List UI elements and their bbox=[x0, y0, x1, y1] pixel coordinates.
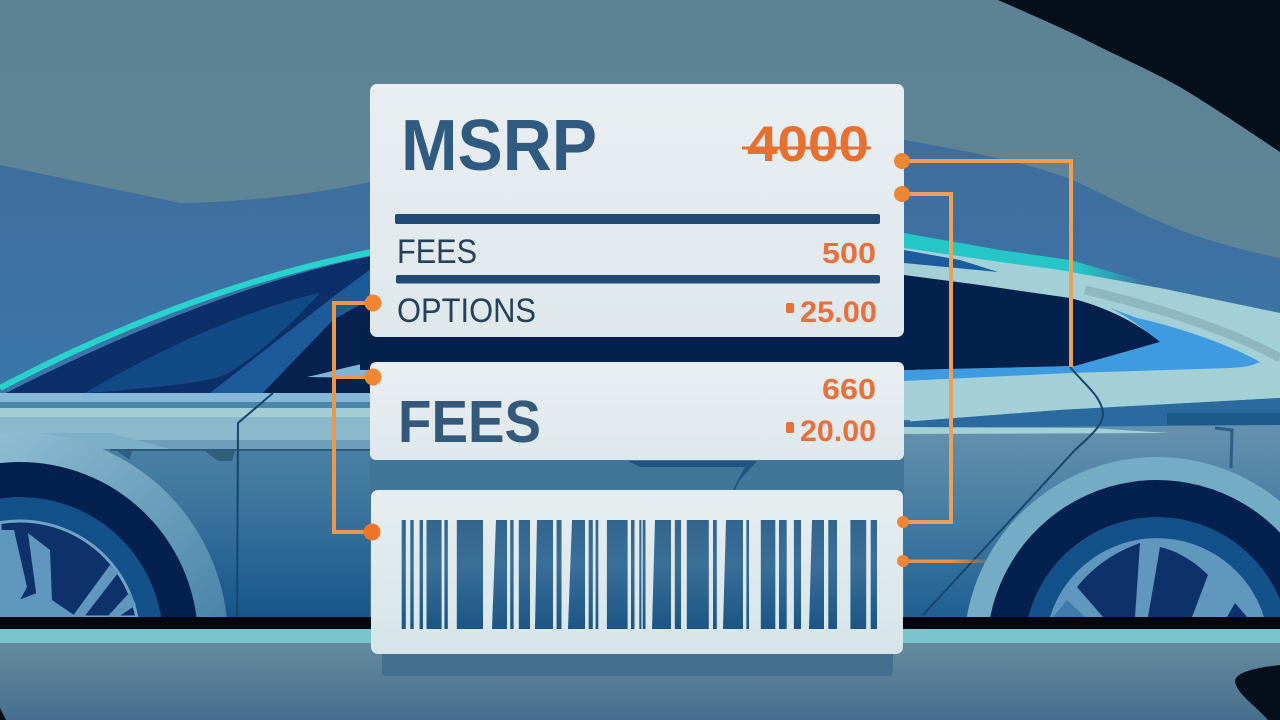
blue hill behind car bbox=[0, 140, 1280, 430]
connector: left bracket bbox=[334, 303, 373, 532]
barcode bbox=[402, 520, 877, 629]
left wheel bbox=[0, 432, 227, 617]
teal roof line left bbox=[0, 252, 372, 388]
price: struck through: 4000 bbox=[747, 116, 869, 172]
dark shape bottom right bbox=[1235, 665, 1280, 720]
pale lower stripe right bbox=[904, 427, 1170, 434]
dark corner top right bbox=[998, 0, 1280, 152]
divider two bbox=[396, 275, 880, 284]
blue band right bbox=[904, 398, 1280, 428]
ground band bbox=[0, 617, 1280, 720]
windshield teal trim right bbox=[904, 233, 1150, 283]
connector: top right to car bbox=[902, 161, 1071, 367]
dark accent right bbox=[1167, 413, 1280, 425]
value: 500: 500 bbox=[822, 238, 876, 270]
soft shadow on pale band bbox=[1085, 290, 1280, 358]
connector dots bbox=[364, 153, 910, 567]
heading: MSRP: MSRP bbox=[401, 106, 597, 186]
panel: FEES card bbox=[370, 362, 904, 460]
label: OPTIONS: OPTIONS bbox=[397, 292, 536, 330]
left small vent mark bbox=[117, 451, 132, 460]
connector: second right to barcode bbox=[902, 194, 951, 522]
right wheel panes bbox=[1053, 543, 1247, 617]
panel: barcode card bbox=[371, 490, 903, 654]
light blue glass right bbox=[904, 308, 1260, 381]
left side window bbox=[6, 256, 372, 393]
panel: MSRP card bbox=[370, 84, 904, 337]
connector: barcode fading line bbox=[902, 560, 992, 563]
divider one bbox=[395, 214, 880, 224]
lower left body bbox=[0, 393, 380, 617]
car illustration bbox=[0, 233, 1280, 617]
left body stripes bbox=[0, 393, 372, 451]
centre dark window visible between cards bbox=[360, 330, 915, 370]
dark shape bottom left bbox=[0, 708, 6, 720]
right panel mark bbox=[1215, 428, 1232, 468]
value: 660: 660 bbox=[822, 374, 876, 406]
lower centre body bbox=[370, 420, 910, 617]
left door handle bbox=[205, 451, 235, 461]
left wheel spokes bbox=[0, 530, 136, 617]
barcode card shadow bbox=[382, 650, 893, 676]
left door line bbox=[237, 393, 273, 617]
dark window right bbox=[904, 275, 1160, 370]
value: 20.00: 20.00 bbox=[800, 415, 876, 448]
lower right body bbox=[904, 425, 1280, 617]
right wheel bbox=[967, 457, 1280, 617]
pale body band right bbox=[904, 248, 1280, 422]
centre handle shadow bbox=[628, 461, 757, 490]
label: FEES: FEES bbox=[397, 233, 477, 271]
right door line bbox=[923, 367, 1103, 615]
value: 25.00: 25.00 bbox=[800, 296, 877, 329]
small window slit right bbox=[904, 250, 998, 272]
heading: FEES: FEES bbox=[398, 389, 541, 455]
